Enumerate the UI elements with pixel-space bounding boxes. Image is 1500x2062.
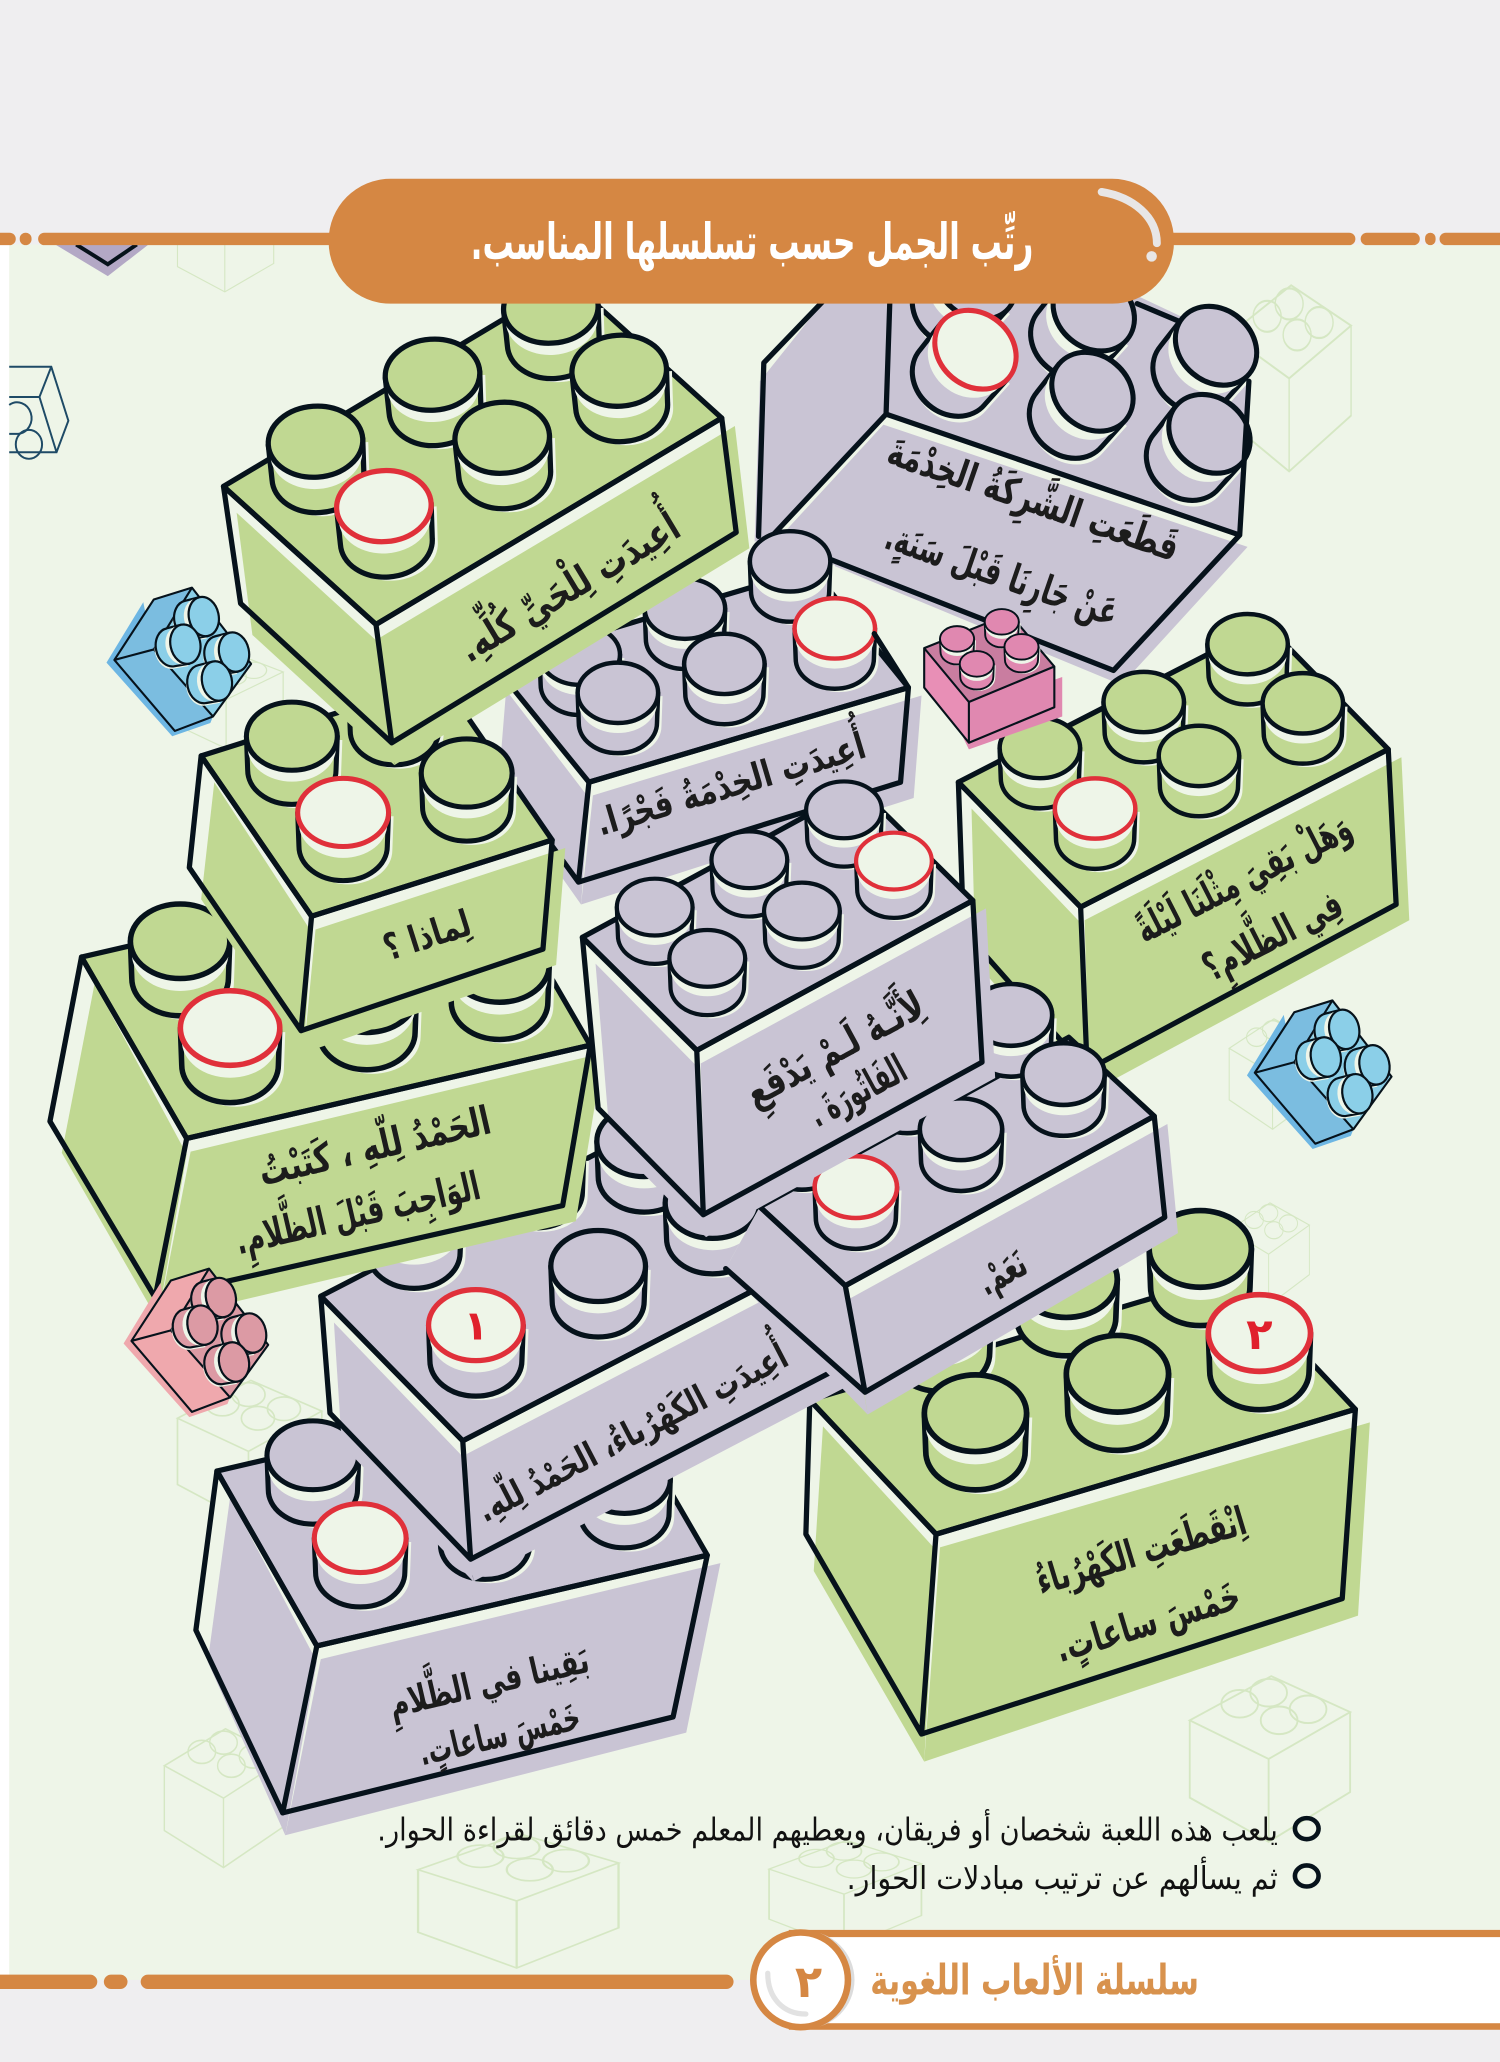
brick: stayed in the dark xyxy=(196,1380,720,1835)
brick: are there others like us: وَهَلْ بَقِيَ مِثْلَنَا لَيْلَةً xyxy=(1127,802,1360,953)
number on red stud: ٢ xyxy=(1246,1310,1273,1360)
bottom orange band xyxy=(0,1975,734,1989)
brick fragment: purple corner under top band xyxy=(55,245,149,276)
brick: because he did not pay the bill: لِأَنَّـهُ لَـمْ يَدْفَعِ xyxy=(733,974,936,1123)
white left margin strip xyxy=(0,245,11,1980)
brick: yes answer: نَعَمْ. xyxy=(969,1240,1035,1305)
series footer bar: سلسلة الألعاب اللغوية xyxy=(870,1953,1199,2005)
small brick: blue lower xyxy=(1247,1000,1394,1149)
brick: cut off service sentence: قَطَعَتِ الشَّرِكَةُ الخِدْمَةَ xyxy=(879,422,1187,577)
brick: service returned at dawn xyxy=(486,531,922,904)
brick: because he did not pay the bill: الفَاتُورَةَ . xyxy=(800,1046,914,1137)
brick: thank God, I wrote the homework: الحَمْدُ لِلّهِ ، كَتَبْتُ xyxy=(253,1090,495,1196)
brick: are there others like us: فِي الظَّلامِ؟ xyxy=(1189,869,1354,998)
top orange band right xyxy=(1157,233,1500,245)
series footer bar xyxy=(753,1930,1500,2030)
brick: cut off service sentence xyxy=(755,224,1276,685)
brick: cut off service sentence: عَنْ جَارِنَا قَبْلَ سَنَةٍ. xyxy=(877,513,1124,642)
brick: thank God, I wrote the homework xyxy=(50,864,603,1320)
brick fragment: navy outline at left edge xyxy=(9,367,68,459)
brick: yes answer xyxy=(726,984,1178,1415)
small brick: salmon xyxy=(124,1269,270,1417)
top orange band left xyxy=(0,233,354,245)
instructions list: يلعب هذه اللعبة شخصان أو فريقان، ويعطيهم المعلم خمس دقائق لقراءة الحوار. xyxy=(377,1808,1278,1848)
title banner xyxy=(329,179,1174,304)
brick: why question: لِماذا ؟ xyxy=(378,901,476,969)
instructions list xyxy=(377,1808,1319,1897)
brick: are there others like us xyxy=(958,614,1409,1092)
brick: the electricity returned, numbered 1: أُعِيدَتِ الكَهْرُباءُ، الحَمْدُ لِلّهِ. xyxy=(463,1322,795,1531)
top gray header area xyxy=(0,0,1500,234)
brick: because he did not pay the bill xyxy=(582,781,995,1237)
brick: returned to the whole neighbourhood xyxy=(223,269,749,765)
brick: why question xyxy=(189,663,565,1053)
number on red stud: ١ xyxy=(463,1302,488,1350)
small brick: blue upper xyxy=(106,588,253,736)
brick: the power went out, numbered 2: خَمْسَ ساعاتٍ. xyxy=(1050,1573,1246,1675)
brick: the power went out, numbered 2 xyxy=(806,1211,1370,1762)
brick: service returned at dawn: أُعِيدَتِ الخِدْمَةُ فَجْرًا. xyxy=(587,709,870,844)
brick: stayed in the dark: بَقِينا في الظَّلامِ xyxy=(382,1626,595,1734)
brick: stayed in the dark: خَمْسَ ساعاتٍ. xyxy=(415,1695,585,1777)
brick: the power went out, numbered 2: اِنْقَطَعَتِ الكَهْرُباءُ xyxy=(1030,1497,1252,1605)
brick: returned to the whole neighbourhood: أُعِيدَتِ لِلْحَيِّ كُلِّهِ. xyxy=(442,490,688,672)
brick: the electricity returned, numbered 1 xyxy=(321,1100,864,1582)
brick: thank God, I wrote the homework: الوَاجِبَ قَبْلَ الظَّلامِ. xyxy=(228,1150,486,1271)
instructions list: ثم يسألهم عن ترتيب مبادلات الحوار. xyxy=(847,1856,1278,1897)
faint background brick outlines xyxy=(164,197,1351,1968)
series footer bar: ٢ xyxy=(795,1956,822,2008)
small brick: pink xyxy=(924,609,1062,749)
title banner: رتِّب الجمل حسب تسلسلها المناسب. xyxy=(471,211,1033,272)
